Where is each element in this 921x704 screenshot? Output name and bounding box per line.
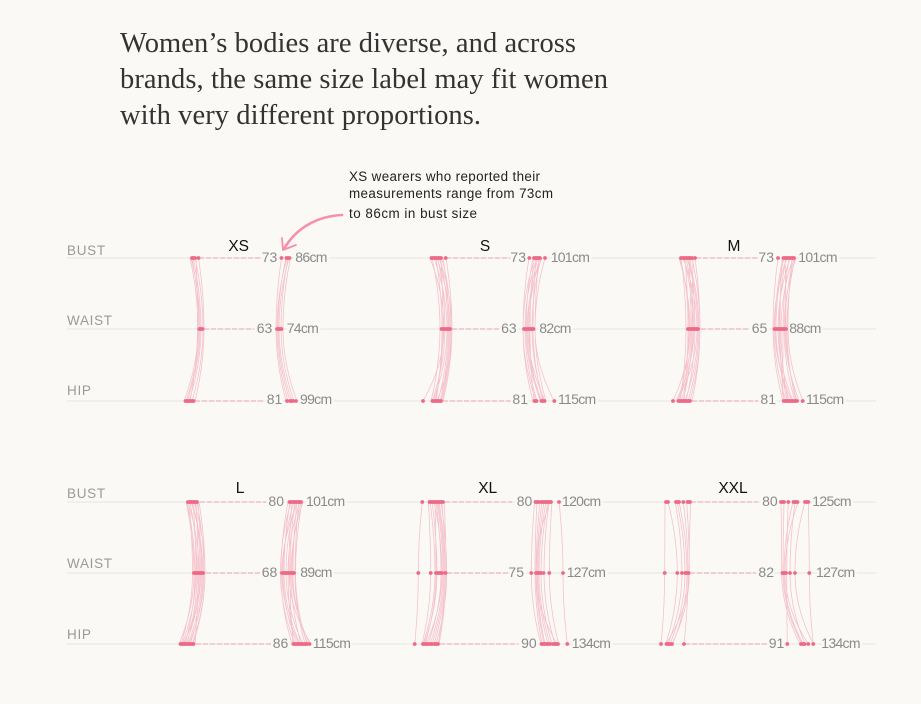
range labels: XS — [195, 249, 331, 407]
body outlines: L — [179, 502, 311, 644]
range labels: S: 81 — [512, 391, 528, 407]
measurement dots: S — [423, 258, 554, 401]
range labels: M: 73 — [758, 249, 774, 265]
range labels: XXL: 91 — [769, 635, 785, 651]
range labels: XXL: 125cm — [812, 493, 851, 509]
range labels: L — [196, 493, 350, 651]
callout: XS bust range: to 86cm in bust size — [349, 206, 477, 221]
heading: L: L — [236, 480, 245, 497]
body outlines: XXL — [661, 502, 813, 644]
title: brands, the same size label may fit women — [120, 64, 608, 95]
heading: XXL: XXL — [718, 480, 748, 497]
measurement dots: XS — [186, 258, 296, 401]
range labels: L: 80 — [268, 493, 284, 509]
range labels: XXL: 127cm — [816, 564, 855, 580]
range labels: S: 63 — [501, 320, 517, 336]
range labels: XL: 90 — [521, 635, 537, 651]
panel: XL — [415, 480, 610, 651]
range labels: M: 115cm — [806, 391, 844, 407]
heading: XL: XL — [478, 480, 498, 497]
panel: XS — [184, 238, 331, 407]
range labels: L: 101cm — [306, 493, 345, 509]
body outlines: XL — [415, 502, 567, 644]
range labels: XL — [440, 493, 610, 651]
range labels: M: 101cm — [798, 249, 837, 265]
row labels: bottom — [67, 486, 113, 642]
title: with very different proportions. — [120, 100, 481, 131]
range labels: XL: 134cm — [572, 635, 610, 651]
range labels: XXL — [685, 493, 860, 651]
range labels: M: 65 — [752, 320, 768, 336]
range labels: M — [692, 249, 844, 407]
body outlines: XS — [184, 258, 297, 401]
range labels: S — [443, 249, 596, 407]
row labels: bottom: BUST — [67, 486, 106, 501]
range labels: XXL: 134cm — [821, 635, 860, 651]
range labels: XXL: 82 — [758, 564, 774, 580]
range labels: XS: 74cm — [287, 320, 318, 336]
range labels: L: 86 — [273, 635, 289, 651]
row labels: bottom: WAIST — [67, 556, 113, 571]
heading: XS: XS — [228, 238, 249, 255]
row labels: top: HIP — [67, 383, 92, 398]
heading: S: S — [480, 238, 490, 255]
panel: M — [673, 238, 844, 407]
range labels: XS: 99cm — [300, 391, 331, 407]
callout: XS bust range — [349, 169, 553, 221]
measurement dots: M — [673, 258, 803, 401]
row labels: top: WAIST — [67, 313, 113, 328]
range labels: L: 115cm — [313, 635, 350, 651]
row labels: top: BUST — [67, 243, 106, 258]
range labels: L: 68 — [262, 564, 278, 580]
range labels: XL: 127cm — [567, 564, 605, 580]
range labels: L: 89cm — [300, 564, 332, 580]
range labels: XXL: 80 — [762, 493, 778, 509]
body outlines: S — [423, 258, 554, 401]
range labels: S: 101cm — [551, 249, 589, 265]
range labels: XS: 81 — [267, 391, 283, 407]
callout: XS bust range: XS wearers who reported their — [349, 169, 541, 184]
range labels: XS: 86cm — [295, 249, 327, 265]
heading: M: M — [728, 238, 740, 255]
range labels: XL: 75 — [508, 564, 524, 580]
title: Women’s bodies are diverse, and across — [120, 28, 576, 59]
range labels: XL: 80 — [517, 493, 533, 509]
range labels: M: 88cm — [789, 320, 821, 336]
callout: XS bust range: measurements range from 73cm — [349, 186, 553, 201]
range labels: S: 73 — [510, 249, 526, 265]
row labels: bottom: HIP — [67, 627, 92, 642]
panel: S — [423, 238, 596, 407]
measurement dots: XXL — [661, 502, 813, 644]
body outlines: M — [673, 258, 803, 401]
panel: XXL — [661, 480, 860, 651]
range labels: XL: 120cm — [562, 493, 601, 509]
measurement dots: L — [180, 502, 310, 644]
range labels: S: 115cm — [558, 391, 596, 407]
panel: L — [179, 480, 350, 651]
range labels: S: 82cm — [539, 320, 571, 336]
range labels: XS: 63 — [257, 320, 273, 336]
title — [120, 28, 608, 131]
measurement dots: XL — [415, 502, 567, 644]
range labels: M: 81 — [760, 391, 776, 407]
arrow: callout to XS bust — [282, 215, 342, 250]
range labels: XS: 73 — [262, 249, 278, 265]
row labels: top — [67, 243, 113, 398]
